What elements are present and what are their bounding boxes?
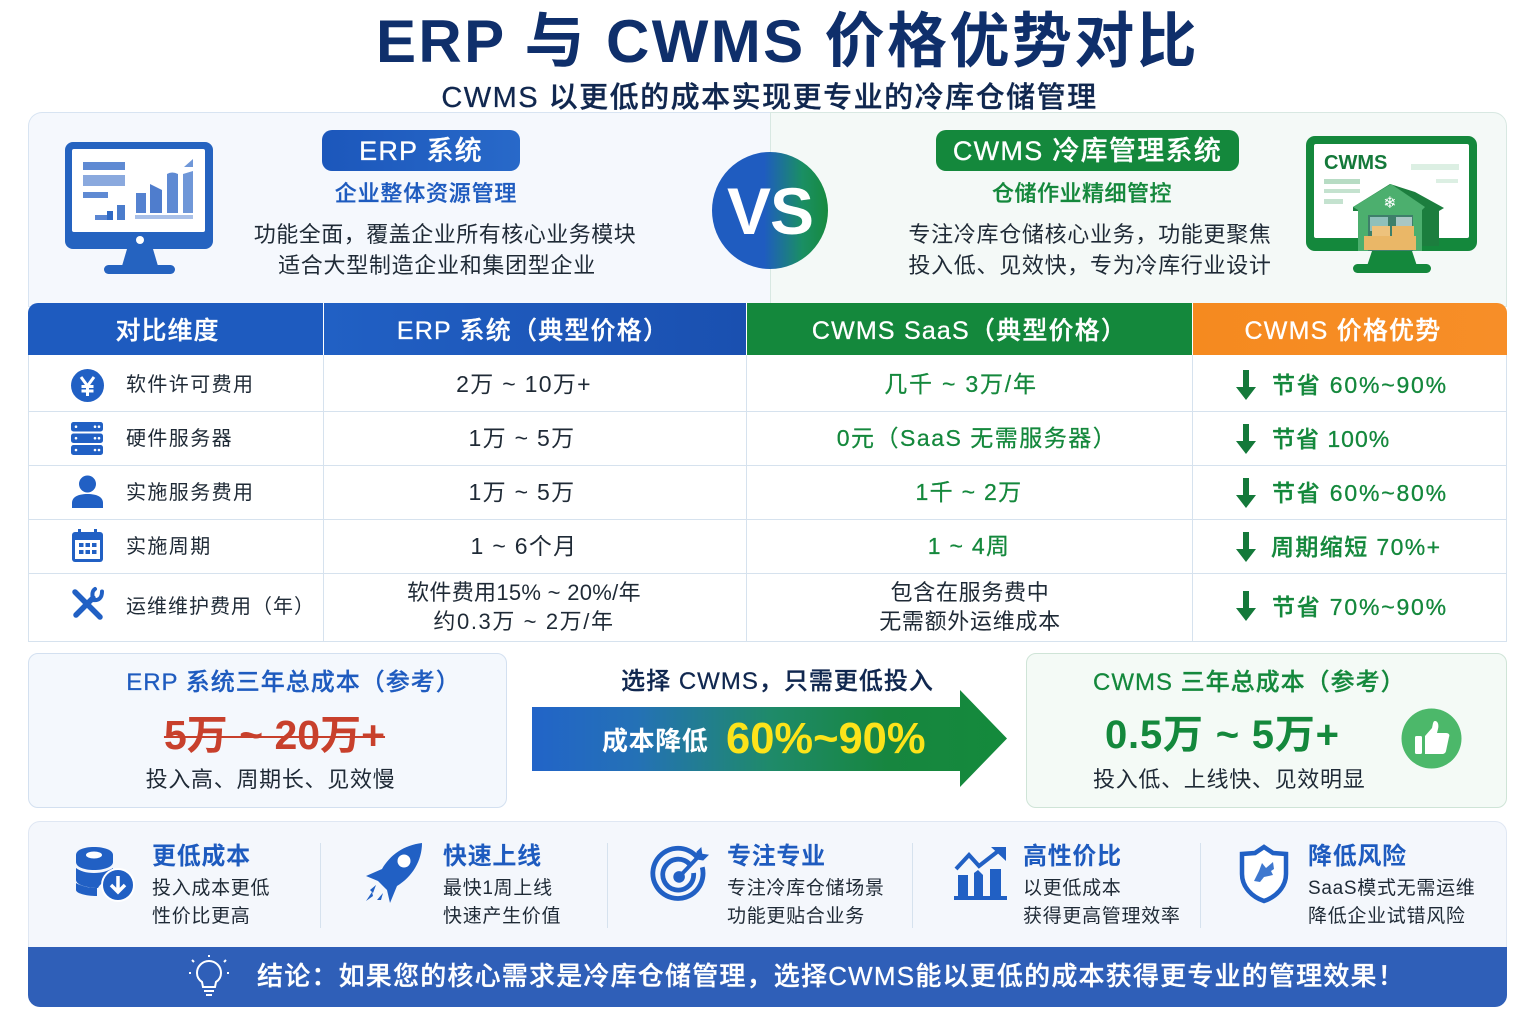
arrow caption: 选择 CWMS，只需更低投入 <box>621 668 934 695</box>
CWMS description <box>908 222 1272 278</box>
benefit text <box>727 878 885 927</box>
icon: saving arrow <box>1236 532 1256 562</box>
ERP maintenance cost <box>407 580 641 634</box>
icon: rocket <box>366 843 422 903</box>
arrow: cost reduction <box>532 690 1007 787</box>
cost value: 0.5万 ~ 5万+ <box>1105 713 1340 757</box>
table header: ERP <box>323 303 746 355</box>
icon: CWMS monitor with warehouse: CWMS <box>1324 152 1387 174</box>
saving: license: 节省 60%~90% <box>1272 372 1448 398</box>
table header: dimension: 对比维度 <box>115 317 220 345</box>
ERP description: 适合大型制造企业和集团型企业 <box>278 253 596 278</box>
table header: advantage <box>1192 303 1507 355</box>
panel: ERP system intro <box>28 112 771 307</box>
benefit text <box>1023 878 1181 927</box>
benefit text: 最快1周上线 <box>443 878 553 899</box>
CWMS license cost: 几千 ~ 3万/年 <box>884 371 1038 397</box>
panel: CWMS system intro <box>770 112 1507 307</box>
benefit heading: 高性价比 <box>1023 843 1122 870</box>
arrow percentage: 60%~90% <box>726 715 926 763</box>
benefit heading: 降低风险 <box>1308 843 1407 870</box>
icon: calendar <box>72 529 103 562</box>
icon: server <box>71 422 103 455</box>
icon: person <box>72 476 103 508</box>
benefit text: 获得更高管理效率 <box>1023 906 1181 927</box>
benefit: value <box>1023 843 1181 927</box>
ERP period: 1 ~ 6个月 <box>471 533 577 559</box>
row label: implementation: 实施服务费用 <box>126 482 254 504</box>
saving: hardware: 节省 100% <box>1272 426 1390 452</box>
saving: period: 周期缩短 70%+ <box>1271 534 1441 560</box>
ERP badge: ERP 系统 <box>359 136 483 166</box>
benefit: focused <box>727 843 885 927</box>
ERP license cost: 2万 ~ 10万+ <box>456 371 592 397</box>
CWMS badge <box>936 130 1239 171</box>
benefit: fast launch <box>443 843 561 927</box>
icon: thumbs up <box>1402 708 1462 768</box>
row label: hardware: 硬件服务器 <box>126 428 233 450</box>
icon: saving arrow <box>1236 478 1256 508</box>
benefit text: 功能更贴合业务 <box>727 906 865 927</box>
benefit heading: 更低成本 <box>152 843 251 870</box>
row label: license: 软件许可费用 <box>126 374 254 396</box>
struck-through cost: 5万 ~ 20万+ <box>164 712 385 758</box>
icon: saving arrow <box>1236 591 1256 621</box>
conclusion text: 结论：如果您的核心需求是冷库仓储管理，选择CWMS能以更低的成本获得更专业的管理效果！ <box>257 961 1405 991</box>
ERP badge <box>322 130 520 171</box>
table header: advantage: CWMS 价格优势 <box>1245 317 1441 345</box>
benefit text: 以更低成本 <box>1023 878 1122 899</box>
ERP maintenance cost: 约0.3万 ~ 2万/年 <box>433 609 615 634</box>
CWMS implementation cost: 1千 ~ 2万 <box>916 479 1022 505</box>
benefit text <box>1308 878 1475 927</box>
card heading: ERP 系统三年总成本（参考） <box>126 669 461 696</box>
title: ERP 与 CWMS 价格优势对比 <box>376 8 1199 75</box>
card note: 投入低、上线快、见效明显 <box>1093 767 1365 792</box>
VS badge <box>712 152 828 269</box>
ERP hardware cost: 1万 ~ 5万 <box>469 425 575 451</box>
saving: implementation: 节省 60%~80% <box>1272 480 1448 506</box>
benefit text: 投入成本更低 <box>152 878 270 899</box>
CWMS badge: CWMS 冷库管理系统 <box>953 136 1222 166</box>
icon: CWMS monitor with warehouse <box>1306 136 1477 273</box>
CWMS tagline: 仓储作业精细管控 <box>992 181 1172 206</box>
benefit text <box>152 878 270 927</box>
arrow label: 成本降低 <box>602 726 708 756</box>
conclusion banner <box>28 947 1507 1007</box>
ERP tagline: 企业整体资源管理 <box>335 181 517 206</box>
benefit heading: 专注专业 <box>727 843 826 870</box>
CWMS maintenance cost <box>879 580 1061 634</box>
icon: light bulb <box>189 955 229 996</box>
CWMS maintenance cost: 包含在服务费中 <box>891 580 1049 605</box>
card: ERP three-year cost <box>28 653 507 808</box>
card note: 投入高、周期长、见效慢 <box>146 767 395 792</box>
table header: CWMS <box>746 303 1192 355</box>
CWMS period: 1 ~ 4周 <box>928 533 1010 559</box>
CWMS hardware cost: 0元（SaaS 无需服务器） <box>837 425 1117 451</box>
icon: shield <box>1240 844 1288 904</box>
icon: saving arrow <box>1236 424 1256 454</box>
icon: growth chart <box>954 847 1007 900</box>
icon: ERP monitor <box>65 142 213 274</box>
icon: tools <box>72 586 104 620</box>
icon: saving arrow <box>1236 370 1256 400</box>
table header: CWMS: CWMS SaaS（典型价格） <box>812 317 1127 345</box>
row label: period: 实施周期 <box>126 536 212 558</box>
saving: maintenance: 节省 70%~90% <box>1272 594 1448 620</box>
card: CWMS three-year cost <box>1026 653 1507 808</box>
icon: database with down arrow <box>76 847 135 902</box>
benefit: lower cost <box>152 843 270 927</box>
panel: benefits <box>28 821 1507 961</box>
card heading: CWMS 三年总成本（参考） <box>1093 669 1406 696</box>
benefit text: 快速产生价值 <box>443 906 561 927</box>
benefit text: 降低企业试错风险 <box>1308 906 1466 927</box>
benefit text: SaaS模式无需运维 <box>1308 878 1475 899</box>
table header: dimension <box>28 303 323 355</box>
icon: yen coin <box>71 369 104 402</box>
VS badge: VS <box>727 174 813 248</box>
table header: ERP: ERP 系统（典型价格） <box>397 317 669 345</box>
CWMS description: 投入低、见效快，专为冷库行业设计 <box>908 253 1272 278</box>
benefit text: 专注冷库仓储场景 <box>727 878 885 899</box>
icon: CWMS monitor with warehouse: ❄ <box>1383 193 1397 212</box>
benefit text <box>443 878 561 927</box>
comparison table <box>28 303 1507 642</box>
CWMS maintenance cost: 无需额外运维成本 <box>879 609 1061 634</box>
benefit: lower risk <box>1308 843 1475 927</box>
row label: maintenance: 运维维护费用（年） <box>126 596 315 618</box>
benefit heading: 快速上线 <box>443 843 542 870</box>
subtitle: CWMS 以更低的成本实现更专业的冷库仓储管理 <box>441 82 1098 114</box>
ERP maintenance cost: 软件费用15% ~ 20%/年 <box>407 580 641 605</box>
icon: target <box>650 846 709 901</box>
ERP description: 功能全面，覆盖企业所有核心业务模块 <box>254 222 636 247</box>
CWMS description: 专注冷库仓储核心业务，功能更聚焦 <box>908 222 1272 247</box>
ERP description <box>254 222 636 278</box>
ERP implementation cost: 1万 ~ 5万 <box>469 479 575 505</box>
benefit text: 性价比更高 <box>152 906 251 927</box>
